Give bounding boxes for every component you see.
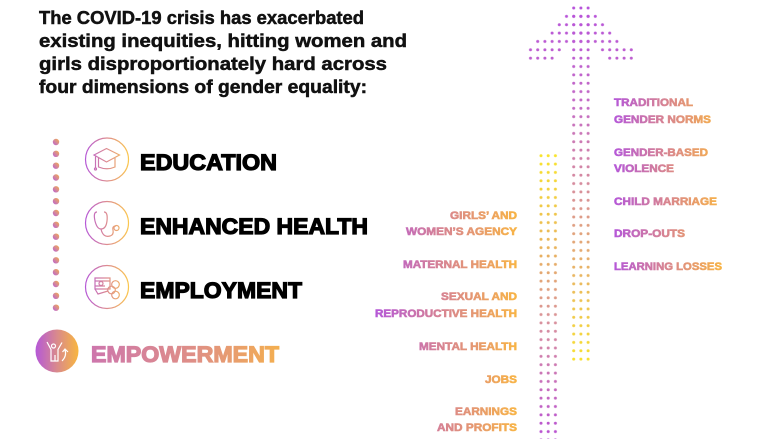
labels: left column: MATERNAL HEALTH <box>403 259 517 271</box>
labels: left column <box>375 210 518 434</box>
labels: left column: JOBS <box>485 374 517 386</box>
labels: left column: SEXUAL AND <box>441 291 517 303</box>
icon: empowerment badge <box>36 330 78 372</box>
icon: employment money and coins <box>86 266 128 308</box>
labels: right column: GENDER-BASED <box>614 147 708 159</box>
labels: right column: GENDER NORMS <box>614 114 711 126</box>
labels: right column: TRADITIONAL <box>614 97 693 109</box>
dotted vertical line <box>53 139 59 311</box>
labels: right column: LEARNING LOSSES <box>614 261 722 273</box>
icon: education graduation cap <box>86 138 128 181</box>
labels: left column: WOMEN’S AGENCY <box>406 226 518 238</box>
labels: left column: GIRLS’ AND <box>450 210 517 222</box>
labels: left column: AND PROFITS <box>437 422 517 434</box>
labels: left column: MENTAL HEALTH <box>419 341 517 353</box>
label: education: EDUCATION <box>140 150 277 175</box>
labels: right column: CHILD MARRIAGE <box>614 196 717 208</box>
labels: right column <box>614 97 722 273</box>
labels: left column: EARNINGS <box>455 406 517 418</box>
label: empowerment: EMPOWERMENT <box>91 342 280 367</box>
labels: right column: VIOLENCE <box>614 163 674 175</box>
title: four dimensions of gender equality: <box>39 76 367 97</box>
labels: left column: REPRODUCTIVE HEALTH <box>375 308 517 320</box>
arrow: long-term dotted column <box>539 154 558 439</box>
title: The COVID-19 crisis has exacerbated <box>39 7 364 28</box>
arrow: short-term impacts dotted upward arrow <box>525 0 637 365</box>
label: enhanced health: ENHANCED HEALTH <box>140 214 368 239</box>
label: employment: EMPLOYMENT <box>140 278 303 303</box>
title: girls disproportionately hard across <box>39 53 387 74</box>
title <box>39 7 407 97</box>
icon: health stethoscope <box>86 202 128 244</box>
labels: right column: DROP-OUTS <box>614 228 685 240</box>
title: existing inequities, hitting women and <box>39 30 407 51</box>
